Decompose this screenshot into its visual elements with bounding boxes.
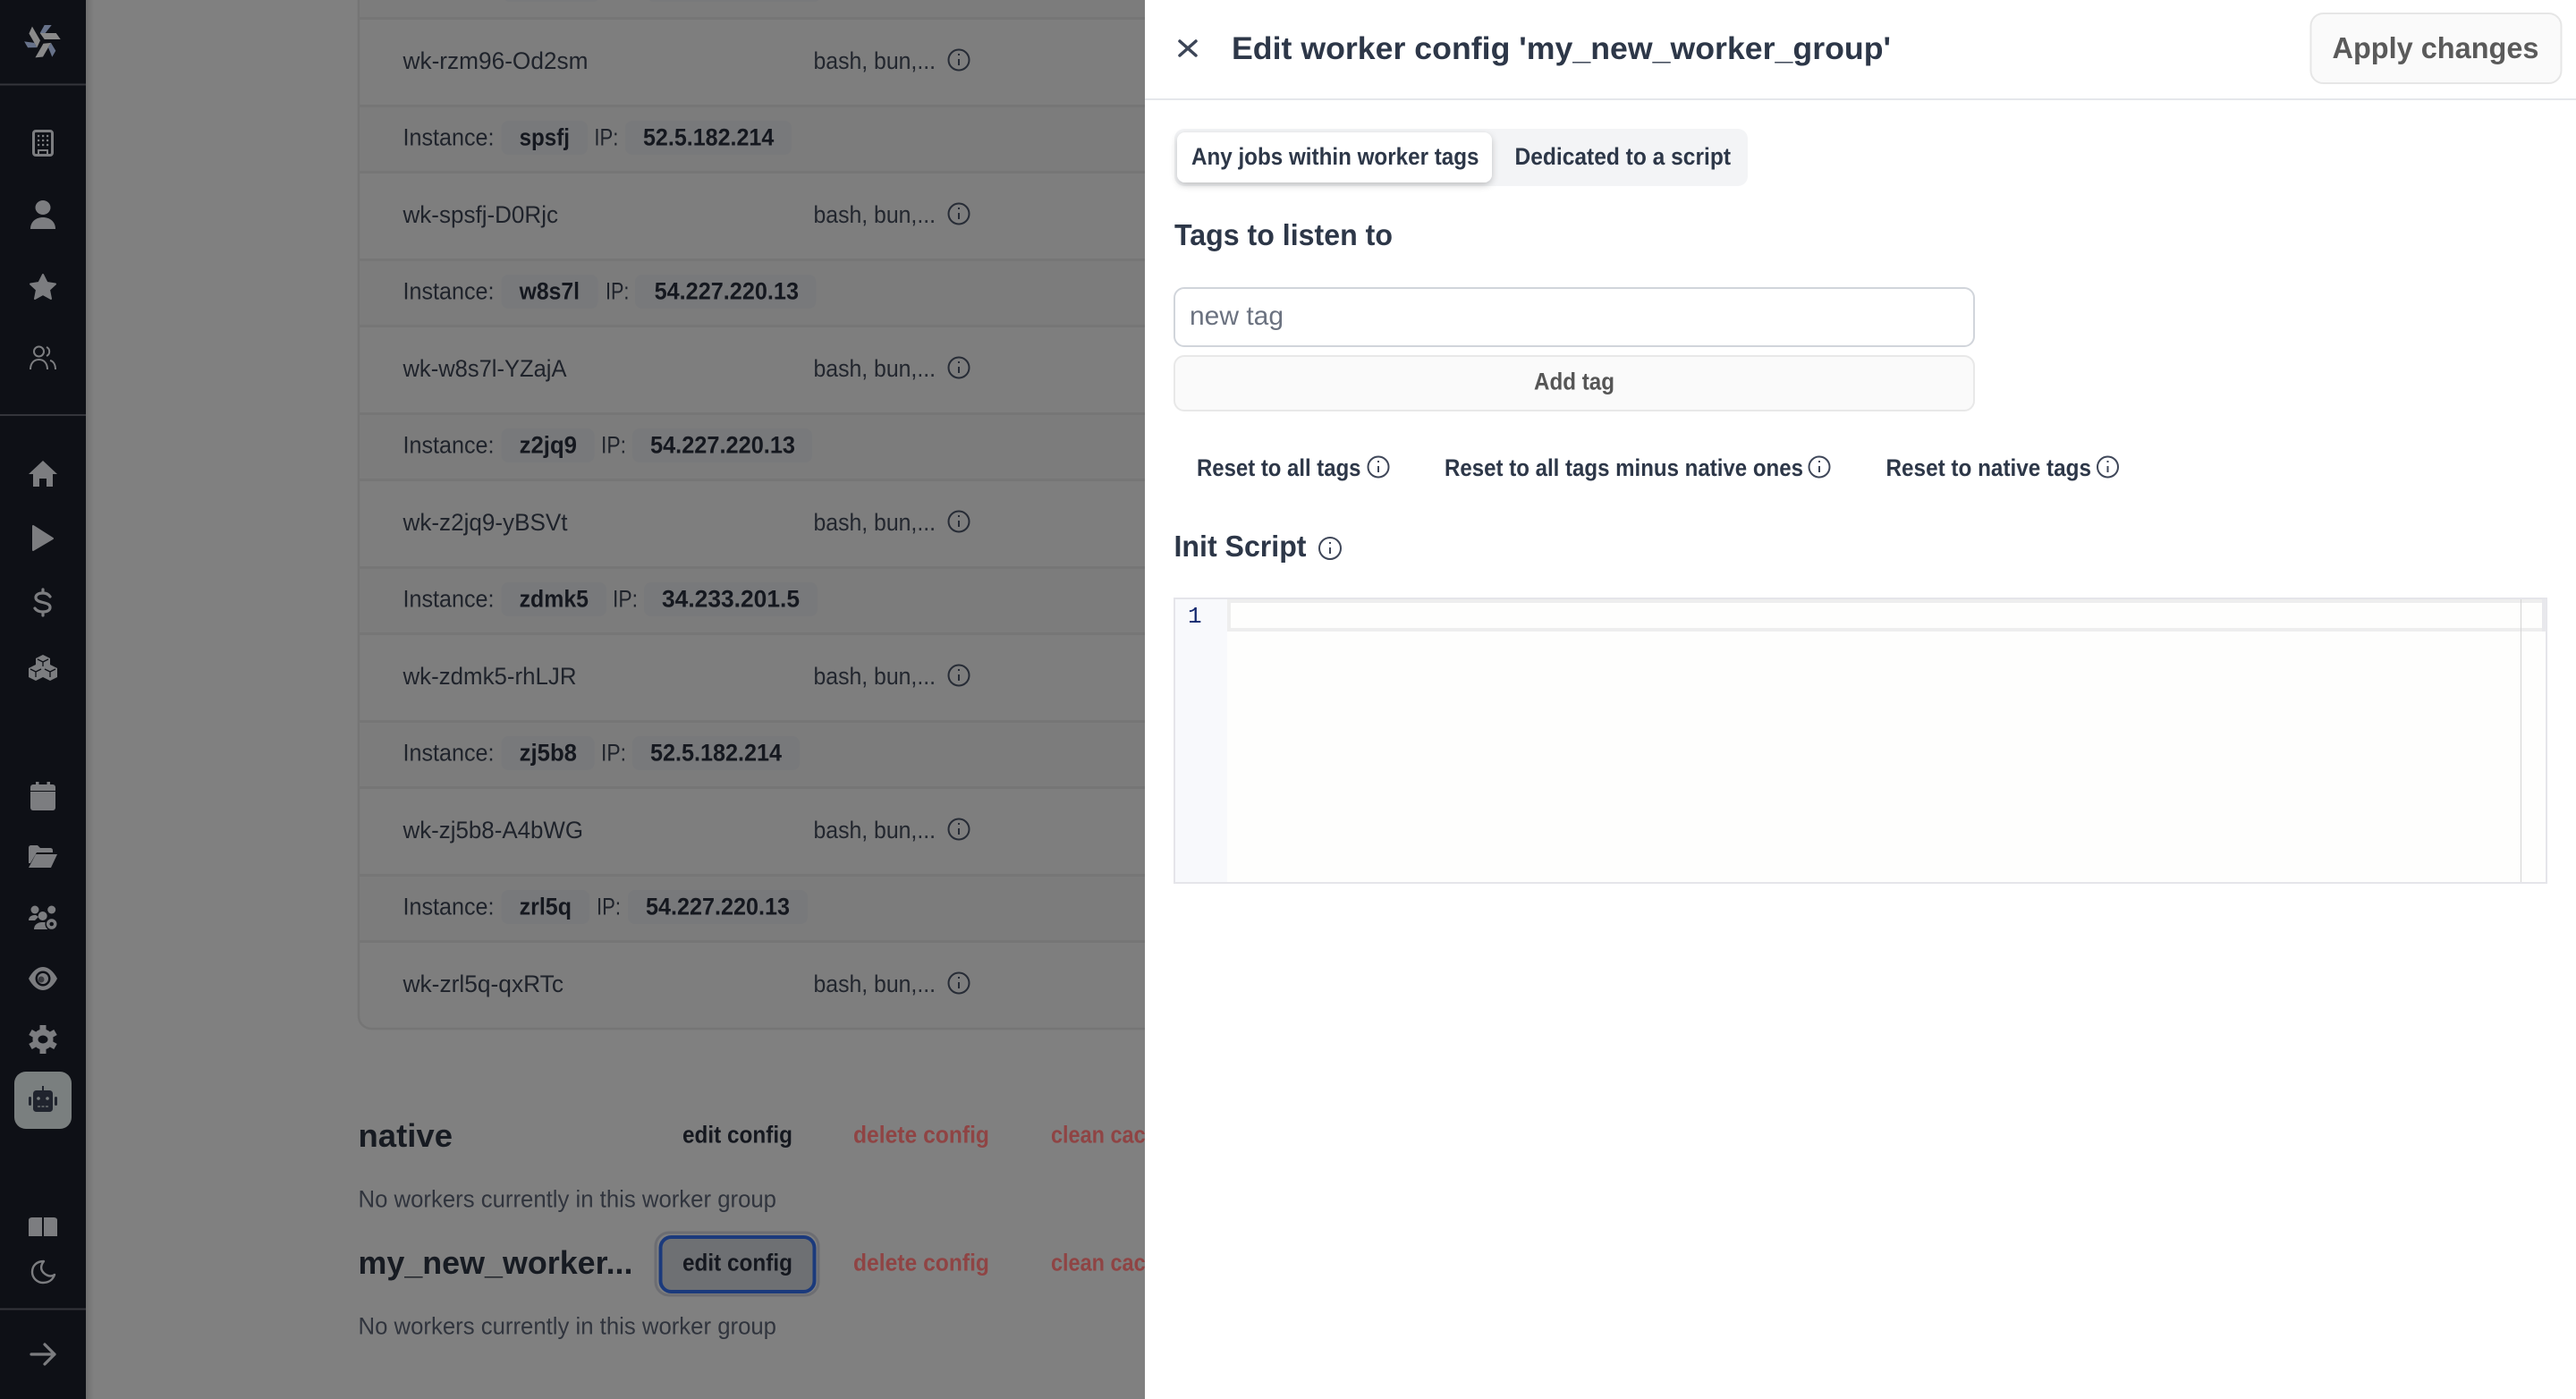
editor gutter [1175,599,1227,882]
icon: calendar [30,782,55,810]
icon: cubes [29,655,57,681]
icon: book [29,1217,57,1236]
button: reset minus native: Reset to all tags minus native ones [1445,454,1803,481]
instance row: zdmk5: 34.233.201.5 [662,585,800,612]
worker group: native [358,1117,1170,1213]
instance row: zdmk5 [402,582,818,616]
worker row: wk-rzm96-Od2sm: bash, bun,... [814,47,936,74]
worker row: wk-zj5b8-A4bWG: bash, bun,... [814,817,936,844]
panel: sidebar [0,0,94,1399]
instance row: z2jq9: 54.227.220.13 [650,431,795,458]
icon: home [29,461,57,487]
worker group: my_new_worker: my_new_worker... [358,1244,633,1281]
worker group: my_new_worker [358,1233,1170,1340]
icon: play [33,526,53,550]
worker row: wk-spsfj-D0Rjc: bash, bun,... [814,201,936,228]
worker row: wk-w8s7l-YZajA: bash, bun,... [814,355,936,382]
editor gutter: 1 [1188,603,1202,630]
icon: arrow right [31,1344,55,1364]
button: reset to all tags: Reset to all tags [1197,454,1361,481]
instance row: z2jq9 [402,428,812,462]
header [1145,13,2576,100]
worker group: native: clean cache [1051,1122,1170,1149]
input: new tag [1174,288,1974,346]
tab: dedicated to a script: Dedicated to a script [1515,143,1731,170]
button: apply changes: Apply changes [2333,32,2538,65]
instance row: zrl5q: Instance: [402,893,494,920]
worker row: wk-zrl5q-qxRTc: wk-zrl5q-qxRTc [402,971,564,997]
icon: dollar [35,589,50,615]
worker row: wk-spsfj-D0Rjc: wk-spsfj-D0Rjc [402,201,558,228]
worker row: wk-zj5b8-A4bWG [402,817,969,844]
instance row: spsfj [402,121,792,155]
icon: robot active [14,1072,72,1129]
panel: workers table [359,0,1253,1029]
icon: eye [29,967,57,990]
instance row: zdmk5: Instance: [402,585,494,612]
instance row: zj5b8 [402,736,800,770]
icon: star [30,275,55,299]
icon: moon [32,1261,55,1283]
instance row: spsfj: Instance: [402,123,494,150]
worker row: wk-rzm96-Od2sm [402,47,970,74]
instance row: w8s7l: Instance: [402,277,494,304]
worker row: wk-zdmk5-rhLJR: bash, bun,... [814,663,936,690]
worker row: wk-w8s7l-YZajA [402,355,969,382]
heading: init script: Init Script [1174,530,1306,564]
input: new tag: new tag [1190,301,1284,331]
current line highlight [1229,601,2544,630]
button: edit config focused [656,1233,818,1295]
instance row: z2jq9: IP: [601,431,626,458]
worker group: native: native [358,1117,453,1154]
worker group: native: edit config [682,1122,792,1149]
worker row: wk-z2jq9-yBSVt: bash, bun,... [814,509,936,536]
icon: logo [24,25,61,61]
code editor [1174,598,2546,883]
icon: group settings [29,905,57,930]
instance row: zj5b8: IP: [601,739,626,766]
worker row: wk-zrl5q-qxRTc: bash, bun,... [814,971,936,997]
instance row: zrl5q: 54.227.220.13 [646,893,790,920]
instance row: zj5b8: zj5b8 [520,739,577,766]
icon: close [1180,41,1196,55]
worker group: native: No workers currently in this worker group [358,1186,776,1213]
instance row: zdmk5: zdmk5 [520,585,589,612]
button: add tag: Add tag [1534,369,1614,395]
instance row: zrl5q [402,890,808,924]
worker group: my_new_worker: No workers currently in this worker group [358,1313,776,1340]
instance row: z2jq9: Instance: [402,431,494,458]
instance row: w8s7l: IP: [606,277,629,304]
panel: edit worker config drawer [1145,0,2576,1399]
instance row: spsfj: 52.5.182.214 [643,123,775,150]
heading: edit worker config title: Edit worker config 'my_new_worker_group' [1232,31,1891,66]
instance row: w8s7l: 54.227.220.13 [655,277,799,304]
worker row: wk-spsfj-D0Rjc [402,201,969,228]
worker row: wk-zrl5q-qxRTc [402,971,970,997]
worker row: wk-zj5b8-A4bWG: wk-zj5b8-A4bWG [402,817,583,844]
worker row: wk-w8s7l-YZajA: wk-w8s7l-YZajA [402,355,567,382]
instance row: zdmk5: IP: [613,585,638,612]
tab: any jobs active [1177,132,1492,182]
instance row: spsfj: IP: [594,123,618,150]
instance row: z2jq9: z2jq9 [520,431,577,458]
worker group: native: delete config [853,1122,989,1149]
icon: folder [29,845,57,868]
worker row: wk-zdmk5-rhLJR: wk-zdmk5-rhLJR [402,663,576,690]
instance row: zj5b8: 52.5.182.214 [650,739,782,766]
worker group: my_new_worker: delete config [853,1249,989,1276]
icon: building [34,131,52,156]
instance row: w8s7l: w8s7l [519,277,580,304]
instance row: spsfj: spsfj [520,123,570,150]
worker row: wk-z2jq9-yBSVt: wk-z2jq9-yBSVt [402,509,568,536]
worker row: wk-rzm96-Od2sm: wk-rzm96-Od2sm [402,47,589,74]
button: add tag [1174,356,1974,411]
instance row: w8s7l [402,275,816,309]
icon: user [30,200,55,229]
instance row: zrl5q: zrl5q [520,893,572,920]
heading: tags to listen to: Tags to listen to [1174,219,1393,252]
button: reset to native tags: Reset to native tags [1885,454,2091,481]
tabs [1174,129,1748,186]
icon: team [30,347,55,369]
instance row: zrl5q: IP: [597,893,621,920]
icon: gear [30,1025,55,1054]
button: apply changes [2311,13,2562,83]
worker group: my_new_worker: clean cache [1051,1249,1170,1276]
worker row: wk-z2jq9-yBSVt [402,509,969,536]
worker row: wk-zdmk5-rhLJR [402,663,970,690]
tab: any jobs active: Any jobs within worker tags [1191,143,1479,170]
instance row: zj5b8: Instance: [402,739,494,766]
button: edit config focused: edit config [682,1249,792,1276]
